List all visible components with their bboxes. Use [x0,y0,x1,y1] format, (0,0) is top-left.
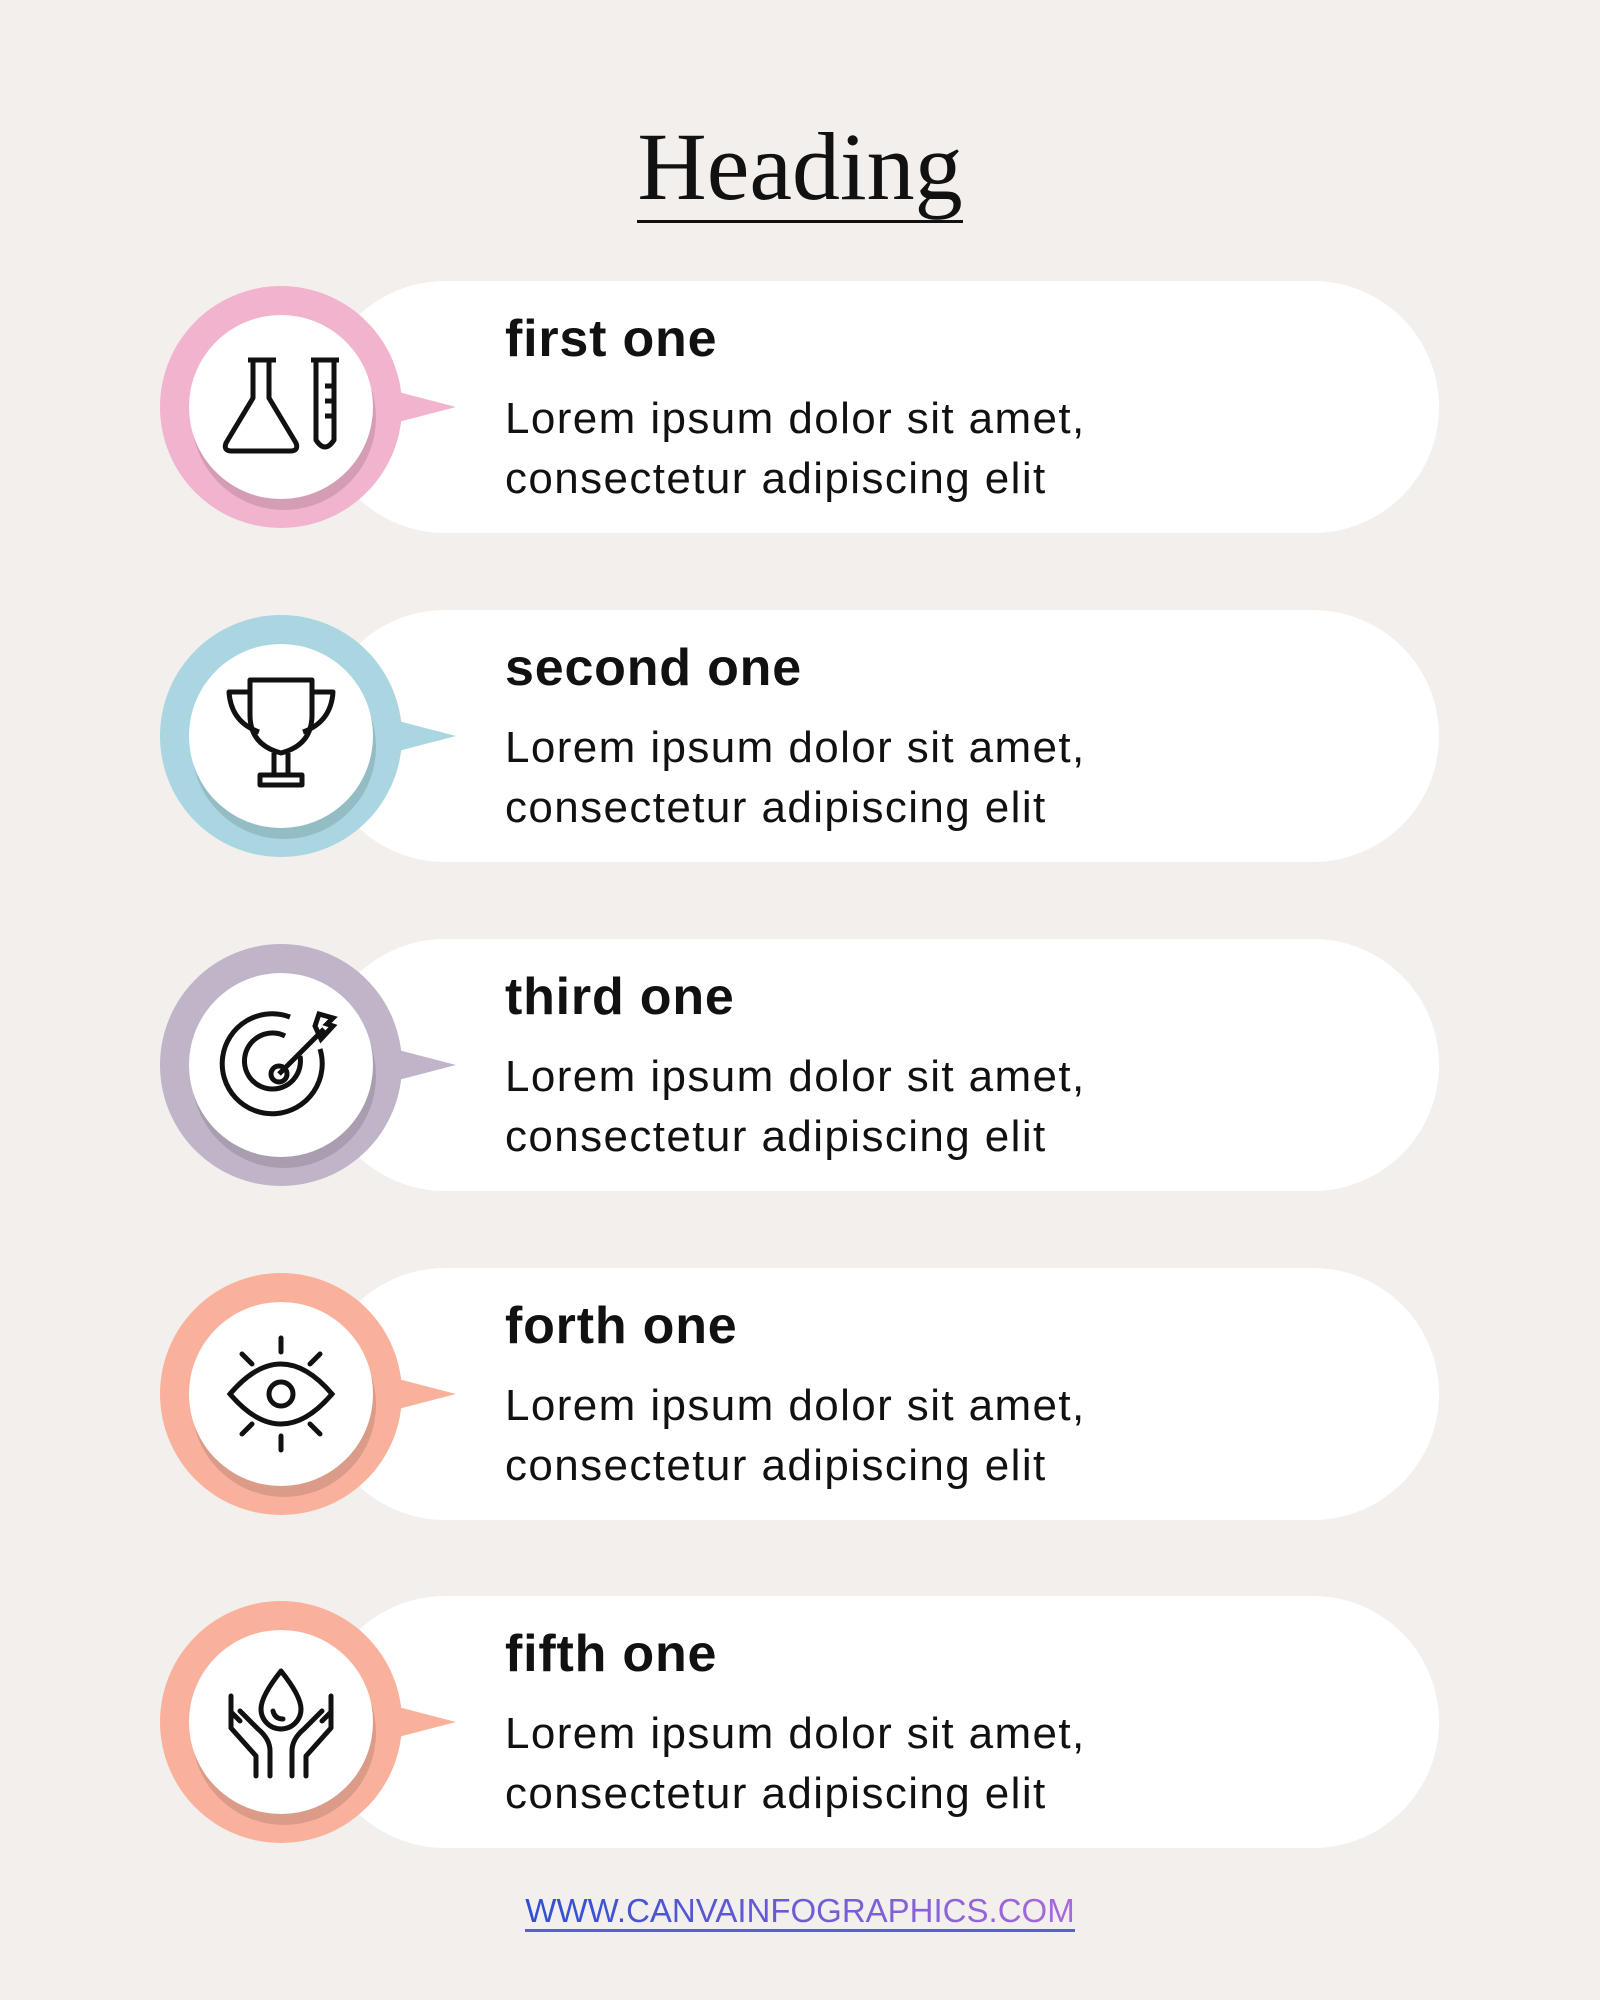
text 5: consectetur adipiscing elit [505,1769,1047,1818]
text 5: fifth one [505,1625,717,1683]
title: Heading [637,113,963,220]
item 5 [160,1596,1439,1848]
text 2: Lorem ipsum dolor sit amet, [505,723,1086,772]
text 4 [505,1297,1086,1490]
text 5 [505,1625,1086,1818]
icon: trophy [160,615,456,857]
item 2 [160,610,1439,862]
text 2: consectetur adipiscing elit [505,783,1047,832]
item 1 [160,281,1439,533]
text 1: Lorem ipsum dolor sit amet, [505,394,1086,443]
item 4 [160,1268,1439,1520]
text 3: third one [505,968,735,1026]
text 1: consectetur adipiscing elit [505,454,1047,503]
footer link: WWW.CANVAINFOGRAPHICS.COM [525,1892,1075,1929]
text 3 [505,968,1086,1161]
icon: target [160,944,456,1186]
text 1: first one [505,310,717,368]
icon: flask and test tube [160,286,456,528]
text 4: consectetur adipiscing elit [505,1441,1047,1490]
text 1 [505,310,1086,503]
text 3: Lorem ipsum dolor sit amet, [505,1052,1086,1101]
icon: hands with drop [160,1601,456,1843]
item 3 [160,939,1439,1191]
text 3: consectetur adipiscing elit [505,1112,1047,1161]
text 2 [505,639,1086,832]
icon: eye [160,1273,456,1515]
text 2: second one [505,639,802,697]
text 4: forth one [505,1297,738,1355]
text 5: Lorem ipsum dolor sit amet, [505,1709,1086,1758]
text 4: Lorem ipsum dolor sit amet, [505,1381,1086,1430]
